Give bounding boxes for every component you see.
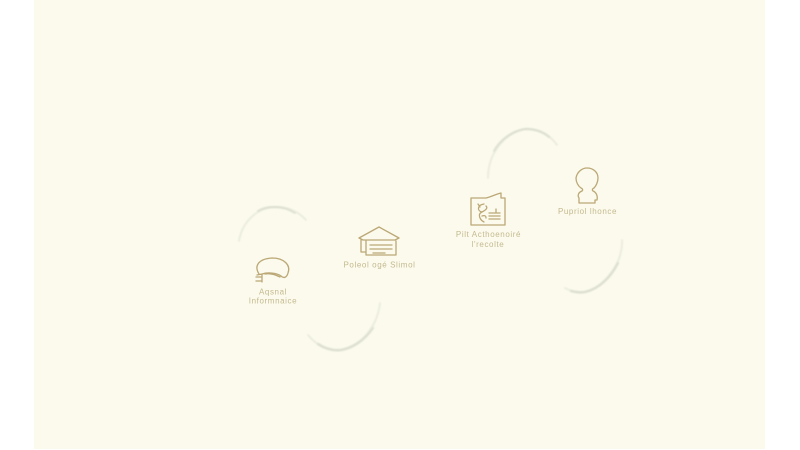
icon: person	[576, 168, 598, 203]
icon: certificate	[471, 193, 505, 225]
step: Document	[456, 129, 557, 249]
icon detail: emblem	[478, 204, 487, 222]
label: document line two: l'recolte	[472, 240, 504, 249]
arc: lower right	[308, 303, 380, 350]
label: Person: Pupriol lhonce	[558, 207, 617, 216]
step: Agent Information	[239, 207, 380, 350]
arc: lower right	[565, 240, 622, 292]
icon: house	[359, 227, 399, 255]
label: Policy: Poleol ogé Slimol	[343, 260, 416, 270]
arc: upper	[488, 129, 557, 178]
step: Policy	[343, 227, 416, 270]
label: second line: Informnaice	[249, 296, 297, 306]
label: Agent Information: Aqsnal	[259, 288, 287, 296]
step: Person	[558, 168, 622, 292]
icon: cap	[256, 258, 289, 282]
label: document line one: Pilt Acthoenoiré	[456, 230, 521, 239]
arc: upper left	[239, 207, 306, 241]
